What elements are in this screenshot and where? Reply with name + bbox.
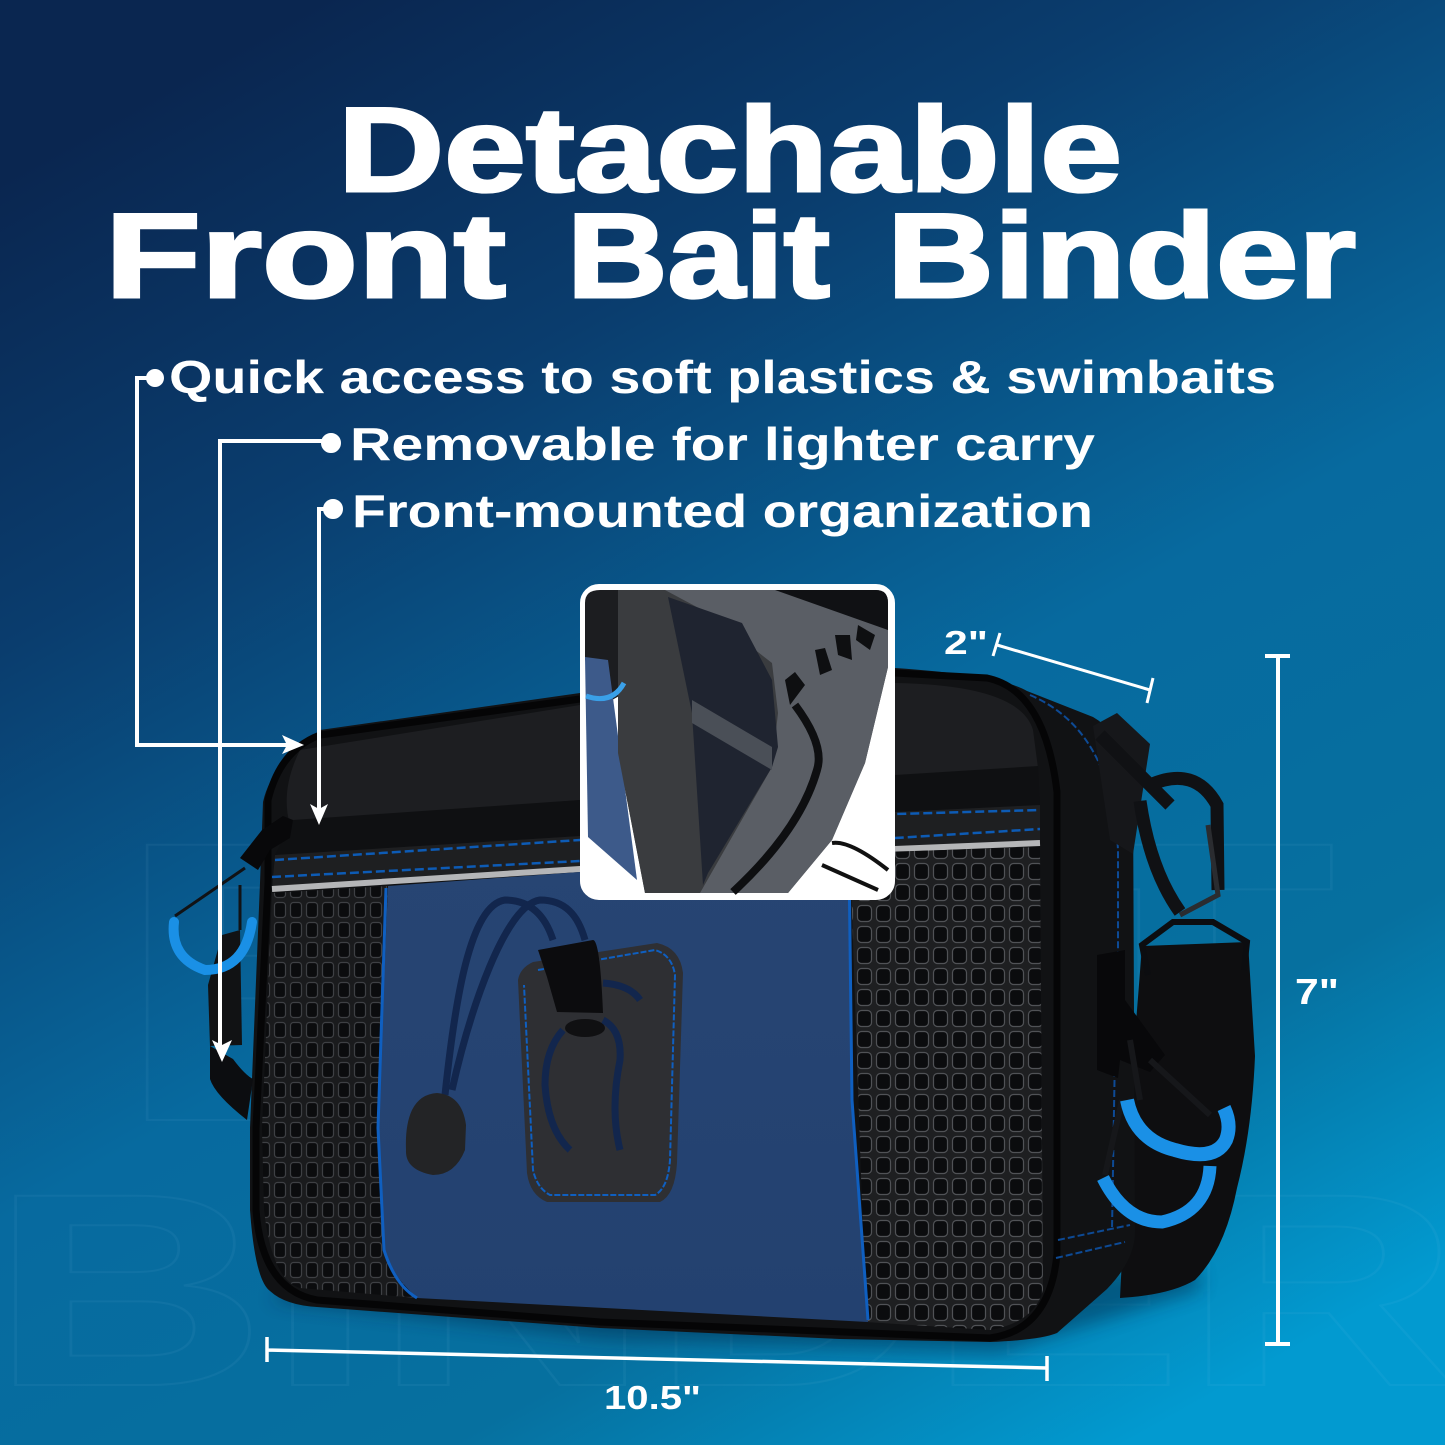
bag body	[250, 668, 1135, 1342]
cord lock	[538, 940, 603, 1013]
callout arrow: quick access	[137, 371, 304, 754]
dimension: width 10.5 in: 10.5"	[604, 1379, 701, 1416]
bag shadow	[270, 1270, 1200, 1352]
webbing band	[272, 805, 1040, 889]
carabiner	[1100, 735, 1218, 912]
right strap loop	[1093, 713, 1150, 854]
navy panel	[378, 856, 868, 1322]
left mesh	[262, 886, 417, 1298]
right mesh	[850, 847, 1043, 1330]
title: Binder	[887, 189, 1356, 323]
feature bullet: removable: Removable for lighter carry	[350, 418, 1096, 470]
blue right clip upper	[1127, 1100, 1229, 1154]
bag strap	[1120, 942, 1255, 1298]
dimension: height 7 in: 7"	[1295, 971, 1339, 1012]
dimension: height 7 in	[1265, 656, 1339, 1344]
left handle cord	[175, 868, 245, 930]
side stitching	[1030, 695, 1130, 1258]
feature bullet: quick access: Quick access to soft plastics & swimbaits	[169, 351, 1276, 403]
callout arrow: removable	[212, 435, 339, 1062]
cord stopper	[565, 1019, 605, 1037]
inset dark top corner	[775, 590, 888, 630]
feature bullet: front-mounted: Front-mounted organization	[352, 485, 1093, 537]
title	[105, 83, 1356, 323]
top panel	[287, 683, 1038, 825]
title: Detachable	[338, 83, 1122, 217]
title: Front	[105, 189, 506, 323]
bungee cord	[445, 900, 640, 1150]
inset grey frame	[618, 590, 703, 893]
callout arrow: front-mounted	[310, 501, 341, 825]
bag photo illustration	[174, 668, 1255, 1352]
inset blue panel	[585, 657, 637, 880]
inset interior	[668, 597, 778, 885]
left lower loop	[210, 1046, 253, 1120]
inset cords	[822, 843, 888, 890]
bungee ball	[406, 1093, 466, 1175]
d-ring	[1142, 922, 1247, 975]
watermark text	[0, 758, 1445, 1444]
dimension: depth 2 in	[944, 624, 1153, 703]
left hardware	[208, 930, 242, 1046]
title: Bait	[567, 189, 830, 323]
right zipper hardware	[1097, 950, 1165, 1078]
dimension: depth 2 in: 2"	[944, 624, 988, 661]
blue stitching	[272, 810, 1040, 877]
watermark text: BINDER	[0, 1137, 1445, 1444]
inset mesh corner	[585, 590, 630, 700]
dimension: width 10.5 in	[267, 1337, 1047, 1416]
inset zipper	[733, 705, 819, 892]
carabiner gate	[1180, 825, 1218, 915]
inset blue handle	[586, 683, 624, 699]
inset photo	[581, 585, 894, 899]
watermark text: BAIT	[112, 758, 1337, 1205]
inset fabric	[665, 590, 888, 893]
navy panel stitching	[378, 860, 868, 1320]
blue left clip	[174, 922, 252, 970]
right cords	[1105, 1040, 1210, 1175]
left zipper pull	[240, 816, 293, 870]
reflective strip	[272, 843, 1040, 889]
patch stitching	[524, 950, 675, 1195]
inset cross band	[692, 700, 772, 770]
front piping	[256, 673, 1057, 1338]
inset zipper pulls	[785, 625, 875, 705]
bungee patch	[518, 943, 683, 1202]
inset base	[618, 590, 888, 893]
zipper	[275, 766, 1040, 855]
blue right clip lower	[1103, 1166, 1210, 1222]
